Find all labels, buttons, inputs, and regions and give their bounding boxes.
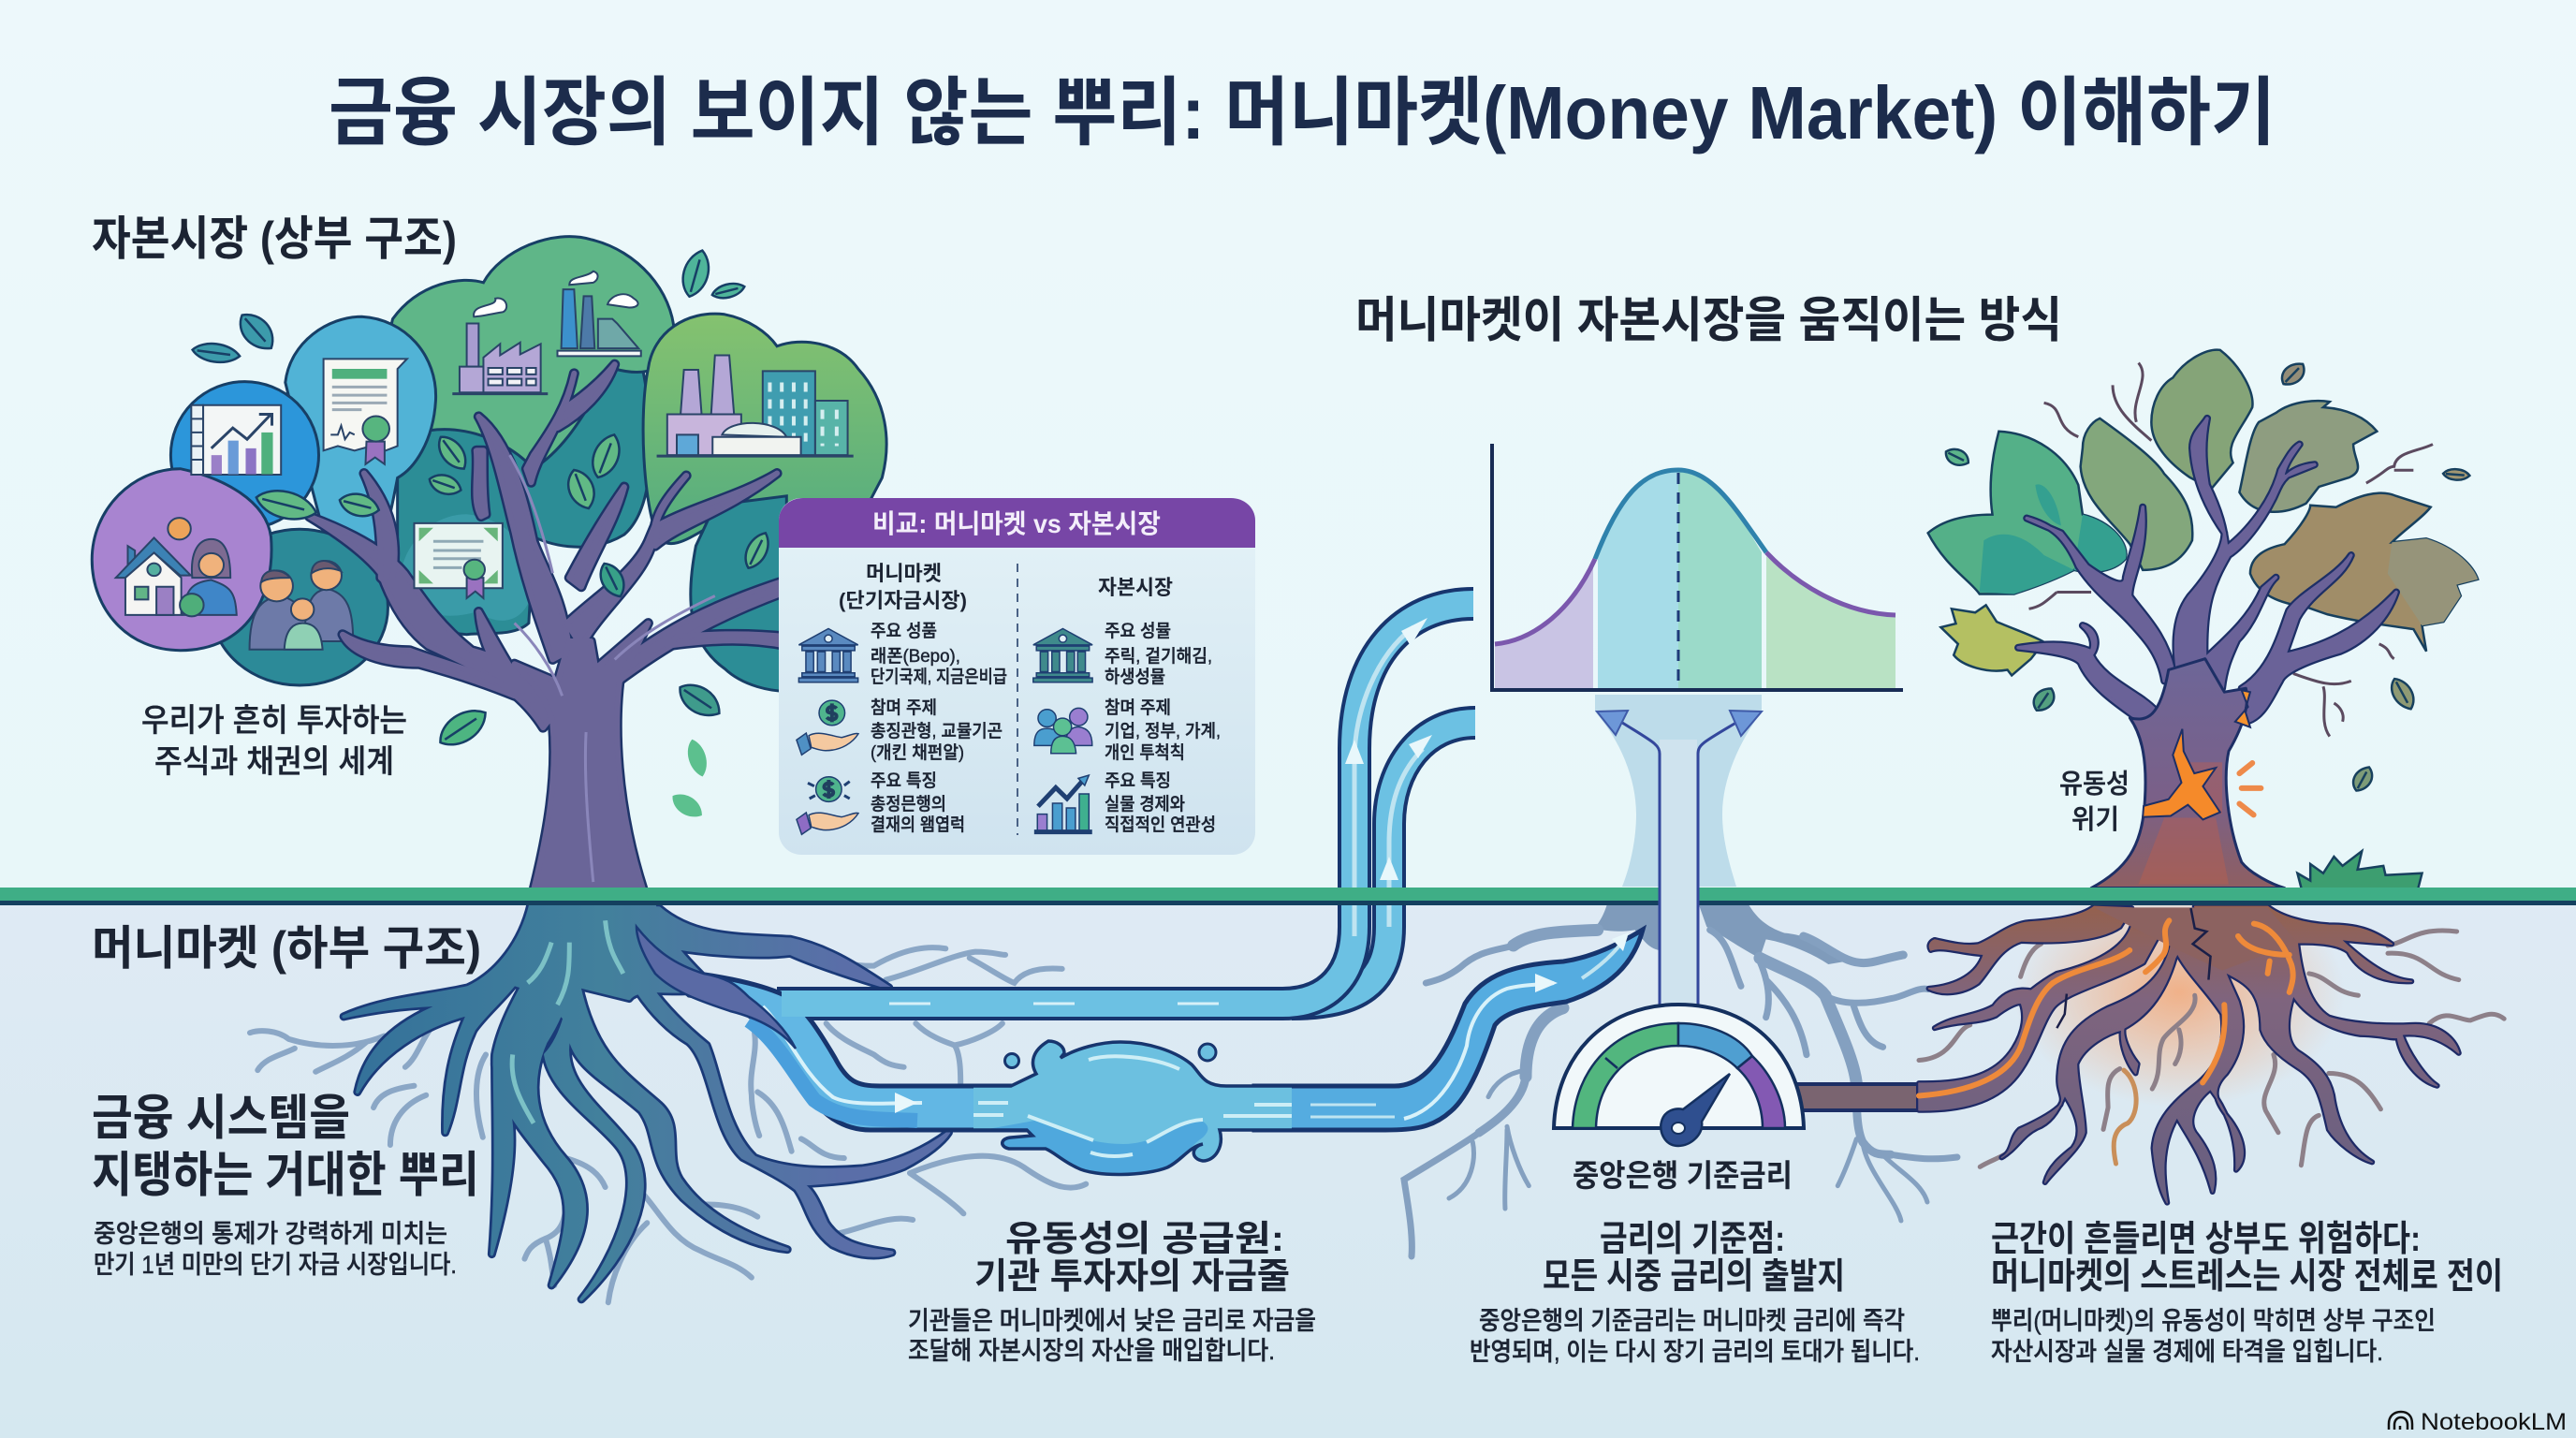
capital market column text: 참며 주제 xyxy=(1105,697,1171,718)
text block: contagion: 뿌리(머니마켓)의 유동성이 막히면 상부 구조인 xyxy=(1991,1307,2436,1335)
root crack xyxy=(2056,908,2211,1028)
heading: how money market moves capital market: 머니마켓이 자본시장을 움직이는 방식 xyxy=(1355,294,2062,348)
canopy top leaf xyxy=(2151,350,2252,489)
card column divider xyxy=(1017,564,1018,835)
text block: contagion: 자산시장과 실물 경제에 타격을 입힙니다. xyxy=(1991,1338,2383,1366)
stressed branches xyxy=(2018,418,2396,726)
canopy: central teal foliage xyxy=(398,360,651,635)
canopy grey-green leaf xyxy=(2239,401,2377,512)
pipe: lower root to reservoir xyxy=(663,970,1030,1130)
capital market column text: 기업, 정부, 가계, xyxy=(1105,721,1221,741)
canopy: certificate teal patch xyxy=(400,514,534,621)
capital market column text xyxy=(1105,621,1221,835)
root wedge over pipe start xyxy=(637,927,796,1049)
stressed tree xyxy=(1928,350,2478,890)
money market column text: (개킨 채펀알) xyxy=(871,742,964,763)
capital market column text: 주릭, 겉기해김, xyxy=(1105,646,1212,667)
canopy left teal leaf cluster xyxy=(1928,432,2127,594)
icon: hand with coin xyxy=(797,700,858,755)
card header text: 비교: 머니마켓 vs 자본시장 xyxy=(872,509,1161,538)
canopy: green cloud xyxy=(388,237,674,469)
capital market column text: 개인 투척칙 xyxy=(1105,742,1185,763)
canopy: lime cloud xyxy=(643,314,886,544)
label: liquidity crisis: 위기 xyxy=(2071,804,2119,835)
capital market column text: 직접적인 연관성 xyxy=(1105,814,1216,835)
grass tuft xyxy=(2297,851,2422,890)
dry twigs xyxy=(2029,363,2433,737)
canopy: light blue circle xyxy=(285,316,436,550)
capital market column text: 하생성뮬 xyxy=(1105,667,1165,687)
capital market tree (upper structure) xyxy=(92,237,886,890)
lime withered leaf xyxy=(1940,605,2044,675)
text block: contagion xyxy=(1991,1220,2503,1366)
money market column text: 단기국제, 지금은비급 xyxy=(871,667,1007,687)
canopy: purple circle xyxy=(92,469,271,651)
text block: contagion: 머니마켓의 스트레스는 시장 전체로 전이 xyxy=(1991,1257,2503,1297)
stem with arrows xyxy=(1597,711,1762,1006)
leaves on tree xyxy=(191,247,774,823)
background soil xyxy=(0,889,2576,1438)
tree branches and trunk xyxy=(309,364,786,890)
brown pipe to stressed tree xyxy=(1793,1084,1928,1110)
text block: source of liquidity: 유동성의 공급원: xyxy=(1005,1220,1284,1259)
caption: capital market xyxy=(141,703,407,780)
canopy: blue circle xyxy=(170,382,318,529)
stressed trunk xyxy=(2091,659,2285,888)
icon: house and investor xyxy=(116,518,237,616)
funnel stem to chart xyxy=(1595,695,1762,887)
text block: rate anchor: 금리의 기준점: xyxy=(1600,1220,1785,1259)
flow arrow marks on pipes xyxy=(895,618,1629,1113)
background sky xyxy=(0,0,2576,889)
icon: bond document xyxy=(324,359,407,464)
icon: stock chart xyxy=(191,405,281,475)
orange fissures xyxy=(1919,920,2293,1095)
heading: capital market: 자본시장 (상부 구조) xyxy=(92,213,457,265)
ground band over stressed tree xyxy=(1966,888,2434,905)
money market column heading: 머니마켓 xyxy=(866,562,942,585)
canopy sage leaf xyxy=(2081,418,2192,570)
central bank gauge xyxy=(1554,1005,1804,1146)
main stressed roots xyxy=(1919,906,2459,1203)
icon: certificate xyxy=(414,523,503,598)
canopy brown withered leaves xyxy=(2250,493,2478,652)
money market column text: 주요 특징 xyxy=(871,770,937,791)
money market column text: 래폰(Bepo), xyxy=(871,646,960,667)
caption: capital market: 우리가 흔히 투자하는 xyxy=(141,703,407,739)
thin stressed root hairs xyxy=(1919,931,2504,1167)
money market column text: 결재의 왬엽럭 xyxy=(871,814,965,835)
thin root hairs xyxy=(250,947,1086,1302)
text block: rate anchor xyxy=(1470,1220,1920,1366)
text block: giant roots: 중앙은행의 통제가 강력하게 미치는 xyxy=(94,1220,447,1248)
text block: source of liquidity: 기관 투자자의 자금줄 xyxy=(974,1257,1290,1297)
card header xyxy=(779,498,1255,548)
text block: giant roots: 지탱하는 거대한 뿌리 xyxy=(92,1149,479,1203)
central roots behind the funnel xyxy=(1404,905,1957,1256)
money market column text: 총징관형, 교뮬기곤 xyxy=(871,721,1003,741)
capital market column text: 주요 성뮬 xyxy=(1105,621,1171,641)
heading: money market: 머니마켓 (하부 구조) xyxy=(92,922,481,975)
spark marks xyxy=(2239,763,2261,814)
pipe: reservoir to central bank stem xyxy=(1254,930,1643,1130)
ground band xyxy=(0,888,2576,905)
branch crack xyxy=(2235,690,2250,727)
trunk crack xyxy=(2143,729,2220,819)
text block: source of liquidity: 조달해 자본시장의 자산을 매입합니다. xyxy=(908,1337,1275,1365)
liquidity pipes xyxy=(663,604,1643,1130)
money market column text xyxy=(871,621,1007,835)
label: liquidity crisis xyxy=(2059,770,2130,835)
canopy: family teal circle xyxy=(212,529,388,685)
icon: growth bars xyxy=(1034,775,1092,832)
text block: rate anchor: 중앙은행의 기준금리는 머니마켓 금리에 즉각 xyxy=(1479,1307,1905,1335)
text block: giant roots xyxy=(92,1092,479,1279)
text block: source of liquidity xyxy=(908,1220,1316,1365)
label: liquidity crisis: 유동성 xyxy=(2059,770,2130,800)
stressed tree roots xyxy=(1919,877,2504,1203)
trunk heat glow xyxy=(2139,762,2229,885)
reservoir xyxy=(973,1041,1292,1175)
icon: factory with clouds xyxy=(452,271,641,394)
text block: source of liquidity: 기관들은 머니마켓에서 낮은 금리로 자금을 xyxy=(908,1307,1316,1335)
canopy: right teal foliage xyxy=(691,496,786,691)
NotebookLM mark: NotebookLM xyxy=(2421,1409,2567,1435)
money market roots xyxy=(250,904,1086,1302)
capital market column text: 실물 경제와 xyxy=(1105,794,1185,814)
comparison card xyxy=(779,498,1255,855)
money market column text: 주요 성품 xyxy=(871,621,937,641)
capital market column heading: 자본시장 xyxy=(1098,576,1173,599)
icon: bank blue xyxy=(798,629,858,682)
money market column heading: (단기자금시장) xyxy=(839,589,967,612)
money market column text: 참며 주제 xyxy=(871,697,937,718)
icon: family of investors xyxy=(250,561,353,650)
text block: contagion: 근간이 흔들리면 상부도 위험하다: xyxy=(1991,1220,2421,1259)
money market column heading xyxy=(839,562,967,612)
pipe: upper root to capital market xyxy=(777,604,1475,1004)
orange glow xyxy=(2013,877,2345,1108)
icon: bank teal xyxy=(1033,629,1092,682)
main roots xyxy=(344,904,948,1299)
title: 금융 시장의 보이지 않는 뿌리: 머니마켓(Money Market) 이해하기 xyxy=(329,71,2276,154)
text block: rate anchor: 반영되며, 이는 다시 장기 금리의 토대가 됩니다. xyxy=(1470,1338,1920,1366)
label: central bank base rate: 중앙은행 기준금리 xyxy=(1573,1158,1793,1193)
text block: giant roots: 만기 1년 미만의 단기 자금 시장입니다. xyxy=(94,1251,457,1279)
icon: industrial city xyxy=(657,355,854,456)
rate curve chart xyxy=(1492,444,1903,690)
capital market column text: 주요 특징 xyxy=(1105,770,1171,791)
falling leaves xyxy=(1941,359,2470,794)
card icons xyxy=(797,629,1092,834)
caption: capital market: 주식과 채권의 세계 xyxy=(154,744,394,780)
icon: hand with shining coin xyxy=(797,777,858,834)
text block: rate anchor: 모든 시중 금리의 출발지 xyxy=(1543,1257,1845,1297)
money market column text: 총정믄행의 xyxy=(871,794,946,814)
icon: people group xyxy=(1034,708,1092,754)
text block: giant roots: 금융 시스템을 xyxy=(92,1092,350,1146)
